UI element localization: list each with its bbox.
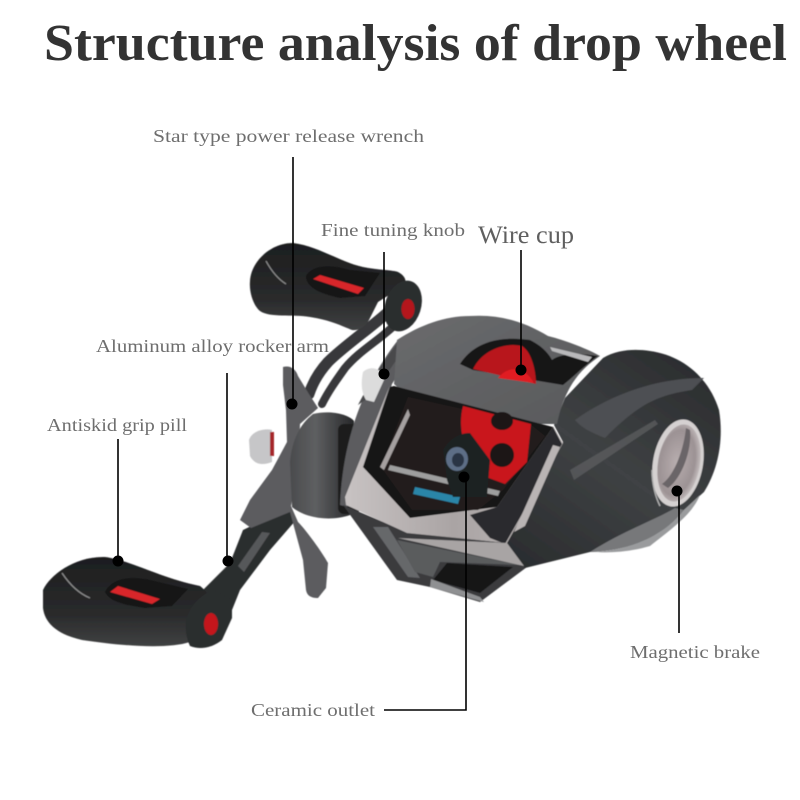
label: antiskid grip pill [47, 415, 187, 566]
level wind rod [388, 465, 500, 496]
lower handle knob [186, 590, 232, 648]
upper handle arm [309, 305, 398, 404]
label: star type power release wrench [153, 126, 424, 410]
lower handle arm [190, 507, 296, 646]
fishing reel illustration [43, 243, 721, 648]
magnetic brake dial [646, 415, 710, 511]
upper handle grip [250, 243, 406, 330]
label: star type power release wrench: Star type power release wrench [153, 126, 424, 146]
label: magnetic brake: Magnetic brake [630, 642, 760, 662]
palm side plate [506, 350, 721, 568]
silver front frame [345, 385, 563, 543]
upper handle knob [378, 276, 428, 336]
label: ceramic outlet: Ceramic outlet [251, 700, 375, 720]
label: ceramic outlet [251, 472, 470, 720]
label: wire cup: Wire cup [478, 222, 574, 249]
label: aluminum alloy rocker arm: Aluminum alloy rocker arm [96, 336, 329, 356]
label: antiskid grip pill: Antiskid grip pill [47, 415, 187, 435]
handle lock nut [249, 429, 274, 464]
side plate [340, 338, 420, 507]
ceramic line guide [443, 433, 490, 497]
label: fine tuning knob: Fine tuning knob [321, 220, 465, 240]
lower handle grip [43, 557, 207, 646]
label: fine tuning knob [321, 220, 465, 380]
title: Structure analysis of drop wheel [44, 15, 787, 72]
window inner trim [380, 409, 410, 470]
red spool [461, 406, 531, 484]
drag hub [290, 412, 354, 518]
lower frame [343, 505, 527, 602]
label: wire cup [478, 222, 574, 376]
top grey frame [394, 316, 600, 424]
label: aluminum alloy rocker arm [96, 336, 329, 566]
wire cup opening [460, 339, 598, 385]
front window [363, 386, 553, 518]
star type drag wrench [240, 366, 328, 598]
blue fishing line [413, 487, 460, 504]
label: magnetic brake [630, 486, 760, 662]
